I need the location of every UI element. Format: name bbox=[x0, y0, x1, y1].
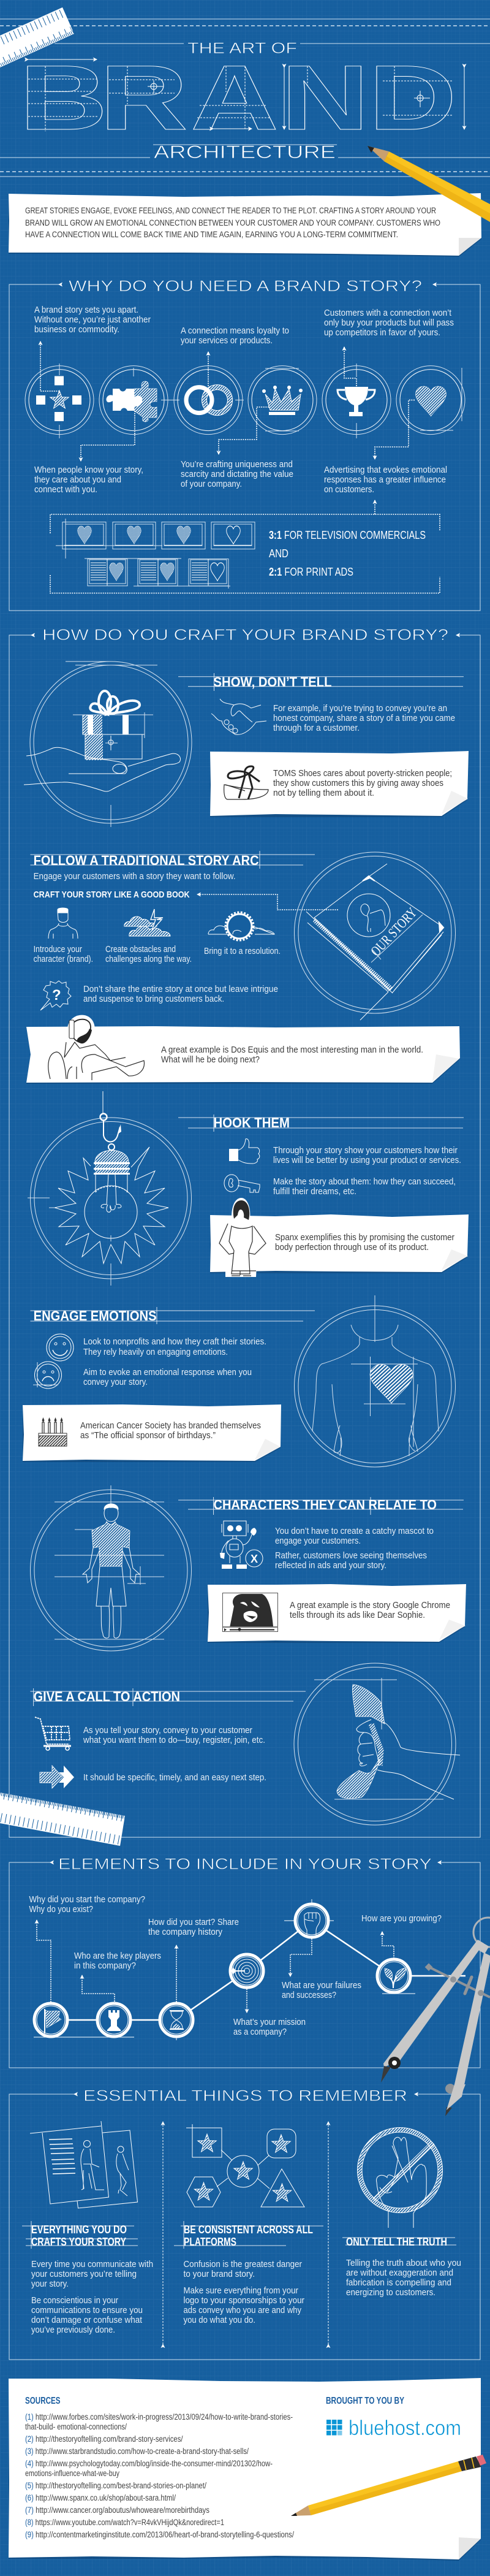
heading: characters: CHARACTERS THEY CAN RELATE TO bbox=[213, 1497, 437, 1512]
heading: truth: ONLY TELL THE TRUTH bbox=[346, 2236, 447, 2248]
text: consistent: to your brand story. bbox=[184, 2269, 255, 2279]
node: fist bbox=[295, 1904, 328, 1937]
text: people know: When people know your story, bbox=[34, 465, 143, 475]
icon: cake bbox=[39, 1417, 67, 1446]
captions bbox=[34, 945, 281, 964]
source list: (5) http://thestoryoftelling.com/best-brand-stories-on-planet/ bbox=[25, 2481, 206, 2490]
heading: elements: ELEMENTS TO INCLUDE IN YOUR STORY bbox=[58, 1856, 432, 1873]
text: toms: TOMS Shoes cares about poverty-stricken people; bbox=[273, 769, 452, 779]
circle icon: heart bbox=[396, 366, 465, 435]
text: consistent: ads convey who you are and why bbox=[184, 2306, 302, 2315]
node: chess rook bbox=[97, 2003, 130, 2037]
text: cancer society: American Cancer Society has branded themselves bbox=[80, 1421, 261, 1431]
text: intrigue bbox=[83, 985, 278, 1004]
source list: (3) http://www.starbrandstudio.com/how-to-create-a-brand-story-that-sells/ bbox=[25, 2447, 249, 2456]
paper: spanx bbox=[210, 1198, 469, 1277]
why icon row bbox=[25, 341, 465, 514]
text: make the story: Make the story about them: how they can succeed, bbox=[273, 1177, 456, 1187]
captions: character (brand). bbox=[34, 955, 93, 964]
why text blocks bbox=[34, 305, 454, 495]
icon: key bbox=[224, 1175, 260, 1192]
ratio box bbox=[50, 514, 440, 593]
text: uniqueness: of your company. bbox=[181, 479, 242, 489]
text: mascot bbox=[275, 1526, 434, 1571]
paper: sources bbox=[9, 2378, 481, 2561]
text: mascot: You don’t have to create a catchy mascot to bbox=[275, 1526, 434, 1536]
intro text: HAVE A CONNECTION WILL COME BACK TIME AND TIME AGAIN, EARNING YOU A LONG-TERM COMMITMENT. bbox=[25, 230, 398, 239]
title line: the art of: THE ART OF bbox=[187, 40, 297, 57]
text: uniqueness bbox=[181, 460, 293, 489]
heading: hook: HOOK THEM bbox=[213, 1115, 290, 1130]
captions: Create obstacles and bbox=[105, 945, 176, 955]
text: consistent: you do what you do. bbox=[184, 2315, 255, 2325]
block: story arc bbox=[26, 851, 460, 1084]
text: nonprofits: Look to nonprofits and how they craft their stories. bbox=[83, 1337, 266, 1347]
icon: character bbox=[48, 908, 78, 939]
text: loyalty: A connection means loyalty to bbox=[181, 326, 289, 336]
text: honest: through for a customer. bbox=[273, 723, 360, 733]
text: convey: what you want them to do—buy, register, join, etc. bbox=[83, 1736, 265, 1745]
text: advertising: on customers. bbox=[324, 485, 374, 495]
block: call to action bbox=[31, 1663, 460, 1825]
paper: birthdays bbox=[23, 1404, 281, 1462]
title block bbox=[0, 19, 490, 177]
heading: call to action: GIVE A CALL TO ACTION bbox=[34, 1689, 180, 1704]
captions: challenges along the way. bbox=[105, 955, 192, 964]
text: sets apart: Without one, you’re just another bbox=[34, 315, 151, 325]
dotted arrows bbox=[37, 1920, 394, 2013]
heading: arc: FOLLOW A TRADITIONAL STORY ARC bbox=[34, 853, 259, 868]
text: sets apart bbox=[34, 305, 151, 335]
text: advertising bbox=[324, 465, 447, 495]
text: engage: Engage your customers with a story they want to follow. bbox=[34, 872, 236, 882]
timeline questions: How did you start? Share bbox=[148, 1918, 239, 1927]
text: toms: not by telling them about it. bbox=[273, 788, 374, 798]
text: nonprofits: They rely heavily on engaging emotions. bbox=[83, 1347, 228, 1357]
illustration: pages with figures bbox=[30, 2121, 137, 2208]
timeline questions: What’s your mission bbox=[233, 2018, 306, 2027]
illustration: star platforms bbox=[186, 2124, 304, 2207]
text: people know: connect with you. bbox=[34, 485, 97, 495]
circle icon: star bbox=[25, 364, 94, 438]
source list: (7) http://www.cancer.org/aboutus/whoweare/morebirthdays bbox=[25, 2506, 209, 2515]
text: spanx bbox=[275, 1233, 454, 1252]
text: convey bbox=[83, 1726, 265, 1745]
text: consistent: logo to your sponsorships to your bbox=[184, 2296, 304, 2306]
timeline questions: Why do you exist? bbox=[29, 1905, 93, 1915]
source list: (4) http://www.psychologytoday.com/blog/inside-the-consumer-mind/201302/how- bbox=[25, 2459, 273, 2468]
timeline questions: What are your failures bbox=[282, 1981, 361, 1991]
gift bow bbox=[90, 691, 140, 714]
text: truth: are without exaggeration and bbox=[346, 2268, 453, 2278]
heading: brought to you by: BROUGHT TO YOU BY bbox=[326, 2396, 404, 2406]
source list: that-build- emotional-connections/ bbox=[25, 2422, 127, 2431]
heading: show: SHOW, DON’T TELL bbox=[213, 674, 332, 690]
text: dos equis bbox=[161, 1045, 423, 1065]
subheading: good book: CRAFT YOUR STORY LIKE A GOOD BOOK bbox=[34, 890, 190, 900]
text: sets apart: A brand story sets you apart. bbox=[34, 305, 138, 315]
text: intrigue: Don’t share the entire story at once but leave intrigue bbox=[83, 985, 278, 994]
dividers bbox=[163, 2122, 328, 2344]
text: mascot: reflected in ads and your story. bbox=[275, 1561, 386, 1571]
icon: shopping cart bbox=[35, 1717, 71, 1750]
intro text bbox=[25, 206, 440, 239]
icon: storm clouds bbox=[124, 909, 170, 936]
text: truth bbox=[346, 2258, 461, 2298]
title word: brand: BRAND bbox=[20, 47, 457, 149]
circle illustration: gift on hand bbox=[24, 661, 192, 827]
heading: consistent: BE CONSISTENT ACROSS ALL bbox=[184, 2224, 313, 2236]
heading: essential: ESSENTIAL THINGS TO REMEMBER bbox=[83, 2087, 407, 2105]
captions: Introduce your bbox=[34, 945, 82, 955]
dotted arrows bbox=[40, 341, 415, 514]
text: aim bbox=[83, 1368, 252, 1387]
text: everything: your customers you’re telling bbox=[31, 2269, 137, 2279]
icon: video frame bbox=[223, 1593, 278, 1632]
text: everything: Every time you communicate with bbox=[31, 2260, 153, 2269]
text: everything bbox=[31, 2260, 153, 2335]
text: competitors: Customers with a connection won’t bbox=[324, 308, 451, 318]
text: honest: honest company, share a story of a time you came bbox=[273, 714, 455, 723]
text: spanx: Spanx exemplifies this by promising the customer bbox=[275, 1233, 454, 1243]
intro paper bbox=[9, 193, 481, 257]
source list bbox=[25, 2412, 294, 2539]
text: specific: It should be specific, timely, and an easy next step. bbox=[83, 1773, 266, 1783]
text: consistent: Make sure everything from your bbox=[184, 2286, 298, 2296]
icon: question bubble: ? bbox=[52, 987, 61, 1004]
source list: emotions-influence-what-we-buy bbox=[25, 2469, 119, 2478]
ratio text: AND bbox=[269, 547, 288, 560]
text: truth: energizing to customers. bbox=[346, 2288, 435, 2298]
story timeline bbox=[29, 1895, 466, 2040]
text: honest: For example, if you’re trying to convey you’re an bbox=[273, 704, 447, 714]
text: better lives: lives will be better by using your product or services. bbox=[273, 1156, 461, 1165]
circle icon: rings bbox=[174, 366, 243, 435]
heading: call to action bbox=[31, 1688, 306, 1706]
heading: consistent bbox=[174, 2221, 323, 2249]
circle icon: puzzle bbox=[99, 366, 244, 435]
text: truth: fabrication is compelling and bbox=[346, 2278, 451, 2288]
text: better lives bbox=[273, 1146, 461, 1165]
text: everything: communications to ensure you bbox=[31, 2306, 143, 2315]
text: dear sophie: tells through its ads like Dear Sophie. bbox=[290, 1610, 425, 1620]
circle illustration: book bbox=[294, 852, 456, 1020]
icon: double arrow bbox=[40, 1766, 74, 1788]
icon: most interesting man bbox=[43, 1015, 147, 1081]
icon: ruler top bbox=[0, 7, 74, 67]
circle icon: crown bbox=[248, 366, 317, 435]
text: consistent bbox=[184, 2260, 304, 2325]
tv screens bbox=[56, 519, 255, 558]
text: aim: convey your story. bbox=[83, 1378, 148, 1387]
column: only the truth bbox=[342, 2127, 461, 2298]
text: dos equis: What will he be doing next? bbox=[161, 1055, 260, 1065]
illustration: crossed fingers bbox=[358, 2127, 442, 2228]
text: people know bbox=[34, 465, 143, 495]
circle icon: trophy bbox=[322, 364, 391, 438]
timeline questions: the company history bbox=[148, 1927, 223, 1937]
hand bbox=[26, 747, 127, 774]
source list: (1) http://www.forbes.com/sites/work-in-progress/2013/09/24/how-to-write-brand-stories- bbox=[25, 2412, 293, 2422]
icon: woman bbox=[217, 1198, 269, 1277]
heading: everything bbox=[22, 2221, 138, 2249]
heading: show bbox=[178, 673, 464, 691]
captions: Bring it to a resolution. bbox=[204, 947, 281, 956]
text: everything: don’t damage or confuse what bbox=[31, 2315, 142, 2325]
starburst bbox=[55, 1147, 168, 1263]
text: aim: Aim to evoke an emotional response when you bbox=[83, 1368, 252, 1378]
paper: dos equis bbox=[26, 1015, 460, 1084]
text: uniqueness: scarcity and dictating the value bbox=[181, 470, 293, 479]
construction lines bbox=[28, 59, 464, 131]
text: intrigue: and suspense to bring customers back. bbox=[83, 994, 224, 1004]
text: people know: they care about you and bbox=[34, 475, 121, 485]
heading: everything: CRAFTS YOUR STORY bbox=[31, 2236, 126, 2248]
ratio text bbox=[269, 529, 426, 578]
timeline questions: in this company? bbox=[74, 1961, 136, 1971]
circle illustration: chest with heart bbox=[294, 1295, 456, 1467]
text: cancer society bbox=[80, 1421, 261, 1441]
timeline questions: Why did you start the company? bbox=[29, 1895, 145, 1905]
text: truth: Telling the truth about who you bbox=[346, 2258, 461, 2268]
print ads bbox=[85, 558, 230, 589]
column: everything you do bbox=[22, 2121, 153, 2335]
text: better lives: Through your story show your customers how their bbox=[273, 1146, 458, 1156]
source list: (6) http://www.spanx.co.uk/shop/about-sara.html/ bbox=[25, 2493, 176, 2502]
source list: (9) http://contentmarketinginstitute.com/2013/06/heart-of-brand-storytelling-6-questions/ bbox=[25, 2530, 294, 2539]
text: honest bbox=[273, 704, 455, 733]
icon: pencil bottom bbox=[291, 2455, 486, 2516]
icon: thumbs up bbox=[229, 1139, 260, 1164]
block: hook them bbox=[28, 1091, 469, 1286]
section frame: essential bbox=[9, 2087, 480, 2360]
icon: happy face bbox=[47, 1334, 74, 1361]
node: plant bbox=[377, 1959, 410, 1992]
text: toms: they show customers this by giving away shoes bbox=[273, 779, 443, 788]
icon: question bubble bbox=[40, 981, 71, 1010]
circle illustration: phone in hand bbox=[294, 1663, 460, 1825]
paper: google chrome bbox=[208, 1584, 466, 1643]
title line: architecture: ARCHITECTURE bbox=[154, 142, 336, 162]
text: everything: your story. bbox=[31, 2279, 69, 2289]
paper: toms bbox=[210, 751, 469, 817]
heading: craft: HOW DO YOU CRAFT YOUR BRAND STORY? bbox=[42, 627, 448, 644]
text: dos equis: A great example is Dos Equis and the most interesting man in the world. bbox=[161, 1045, 423, 1055]
node: target bbox=[230, 1954, 263, 1987]
column: be consistent bbox=[174, 2124, 323, 2325]
text: everything: Be conscientious in your bbox=[31, 2296, 118, 2306]
block: engage emotions bbox=[23, 1295, 456, 1467]
dotted arrow: book bbox=[197, 894, 338, 910]
timeline questions: and successes? bbox=[282, 1991, 336, 2000]
text: loyalty: your services or products. bbox=[181, 336, 273, 346]
icon: handshake bbox=[211, 699, 266, 734]
heading: everything: EVERYTHING YOU DO bbox=[31, 2224, 127, 2236]
node: flag bbox=[34, 2003, 67, 2037]
heading: engage: ENGAGE EMOTIONS bbox=[34, 1308, 157, 1324]
icon: compass bbox=[381, 1918, 490, 2116]
icon: robot mascot bbox=[220, 1521, 263, 1569]
node: hourglass bbox=[160, 2003, 193, 2037]
icon: pencil top bbox=[368, 146, 490, 222]
text: convey: As you tell your story, convey to your customer bbox=[83, 1726, 252, 1736]
source list: (8) https://www.youtube.com/watch?v=R4vkVHijdQk&noredirect=1 bbox=[25, 2518, 224, 2527]
text: loyalty bbox=[181, 326, 289, 346]
text: advertising: Advertising that evokes emotional bbox=[324, 465, 447, 475]
circle illustration: person bbox=[31, 1485, 191, 1651]
ratio text: 3:1 FOR TELEVISION COMMERCIALS bbox=[269, 529, 426, 541]
text: dear sophie bbox=[290, 1601, 450, 1620]
text: dear sophie: A great example is the story Google Chrome bbox=[290, 1601, 450, 1610]
section frame: why bbox=[9, 278, 480, 611]
text: everything: you’ve previously done. bbox=[31, 2325, 115, 2335]
heading: hook bbox=[178, 1115, 464, 1132]
block: characters bbox=[31, 1485, 466, 1651]
text: competitors bbox=[324, 308, 454, 338]
text: competitors: up competitors in favor of yours. bbox=[324, 328, 440, 338]
text: toms bbox=[273, 769, 452, 798]
text: uniqueness: You’re crafting uniqueness and bbox=[181, 460, 293, 470]
icon: shoe with bow bbox=[224, 766, 268, 799]
circle illustration: bulb and hook bbox=[28, 1091, 191, 1286]
block: show don't tell bbox=[24, 661, 469, 827]
icon: ruler lower bbox=[0, 1793, 125, 1846]
section frame: elements bbox=[9, 1856, 480, 2068]
connecting line bbox=[51, 1921, 466, 2020]
text: consistent: Confusion is the greatest danger bbox=[184, 2260, 302, 2269]
text: competitors: only buy your products but will pass bbox=[324, 318, 454, 328]
timeline questions: How are you growing? bbox=[361, 1914, 442, 1924]
heading: sources: SOURCES bbox=[25, 2396, 61, 2406]
logo: bluehost: bluehost.com bbox=[349, 2417, 461, 2440]
heading: consistent: PLATFORMS bbox=[184, 2236, 236, 2248]
timeline questions: Who are the key players bbox=[74, 1951, 161, 1961]
icon: sun and clouds bbox=[208, 912, 274, 940]
timeline questions bbox=[29, 1895, 442, 2037]
text: spanx: body perfection through use of its product. bbox=[275, 1243, 429, 1252]
timeline questions: as a company? bbox=[233, 2027, 287, 2037]
heading: why: WHY DO YOU NEED A BRAND STORY? bbox=[69, 278, 422, 295]
text: nonprofits bbox=[83, 1337, 266, 1357]
text: cancer society: as “The official sponsor of birthdays.” bbox=[80, 1431, 216, 1441]
icon: robot mascot: X bbox=[251, 1553, 258, 1565]
text: sets apart: business or commodity. bbox=[34, 325, 119, 335]
ratio text: 2:1 FOR PRINT ADS bbox=[269, 566, 353, 578]
book title: OUR STORY bbox=[368, 904, 420, 959]
source list: (2) http://thestoryoftelling.com/brand-story-services/ bbox=[25, 2434, 183, 2444]
icon: sad face bbox=[33, 1362, 61, 1389]
text: mascot: Rather, customers love seeing themselves bbox=[275, 1551, 427, 1561]
text: mascot: engage your customers. bbox=[275, 1536, 361, 1546]
text: make the story: fulfill their dreams, etc. bbox=[273, 1187, 356, 1197]
text: make the story bbox=[273, 1177, 456, 1197]
text: advertising: responses has a greater influence bbox=[324, 475, 446, 485]
heading: engage bbox=[31, 1307, 315, 1324]
